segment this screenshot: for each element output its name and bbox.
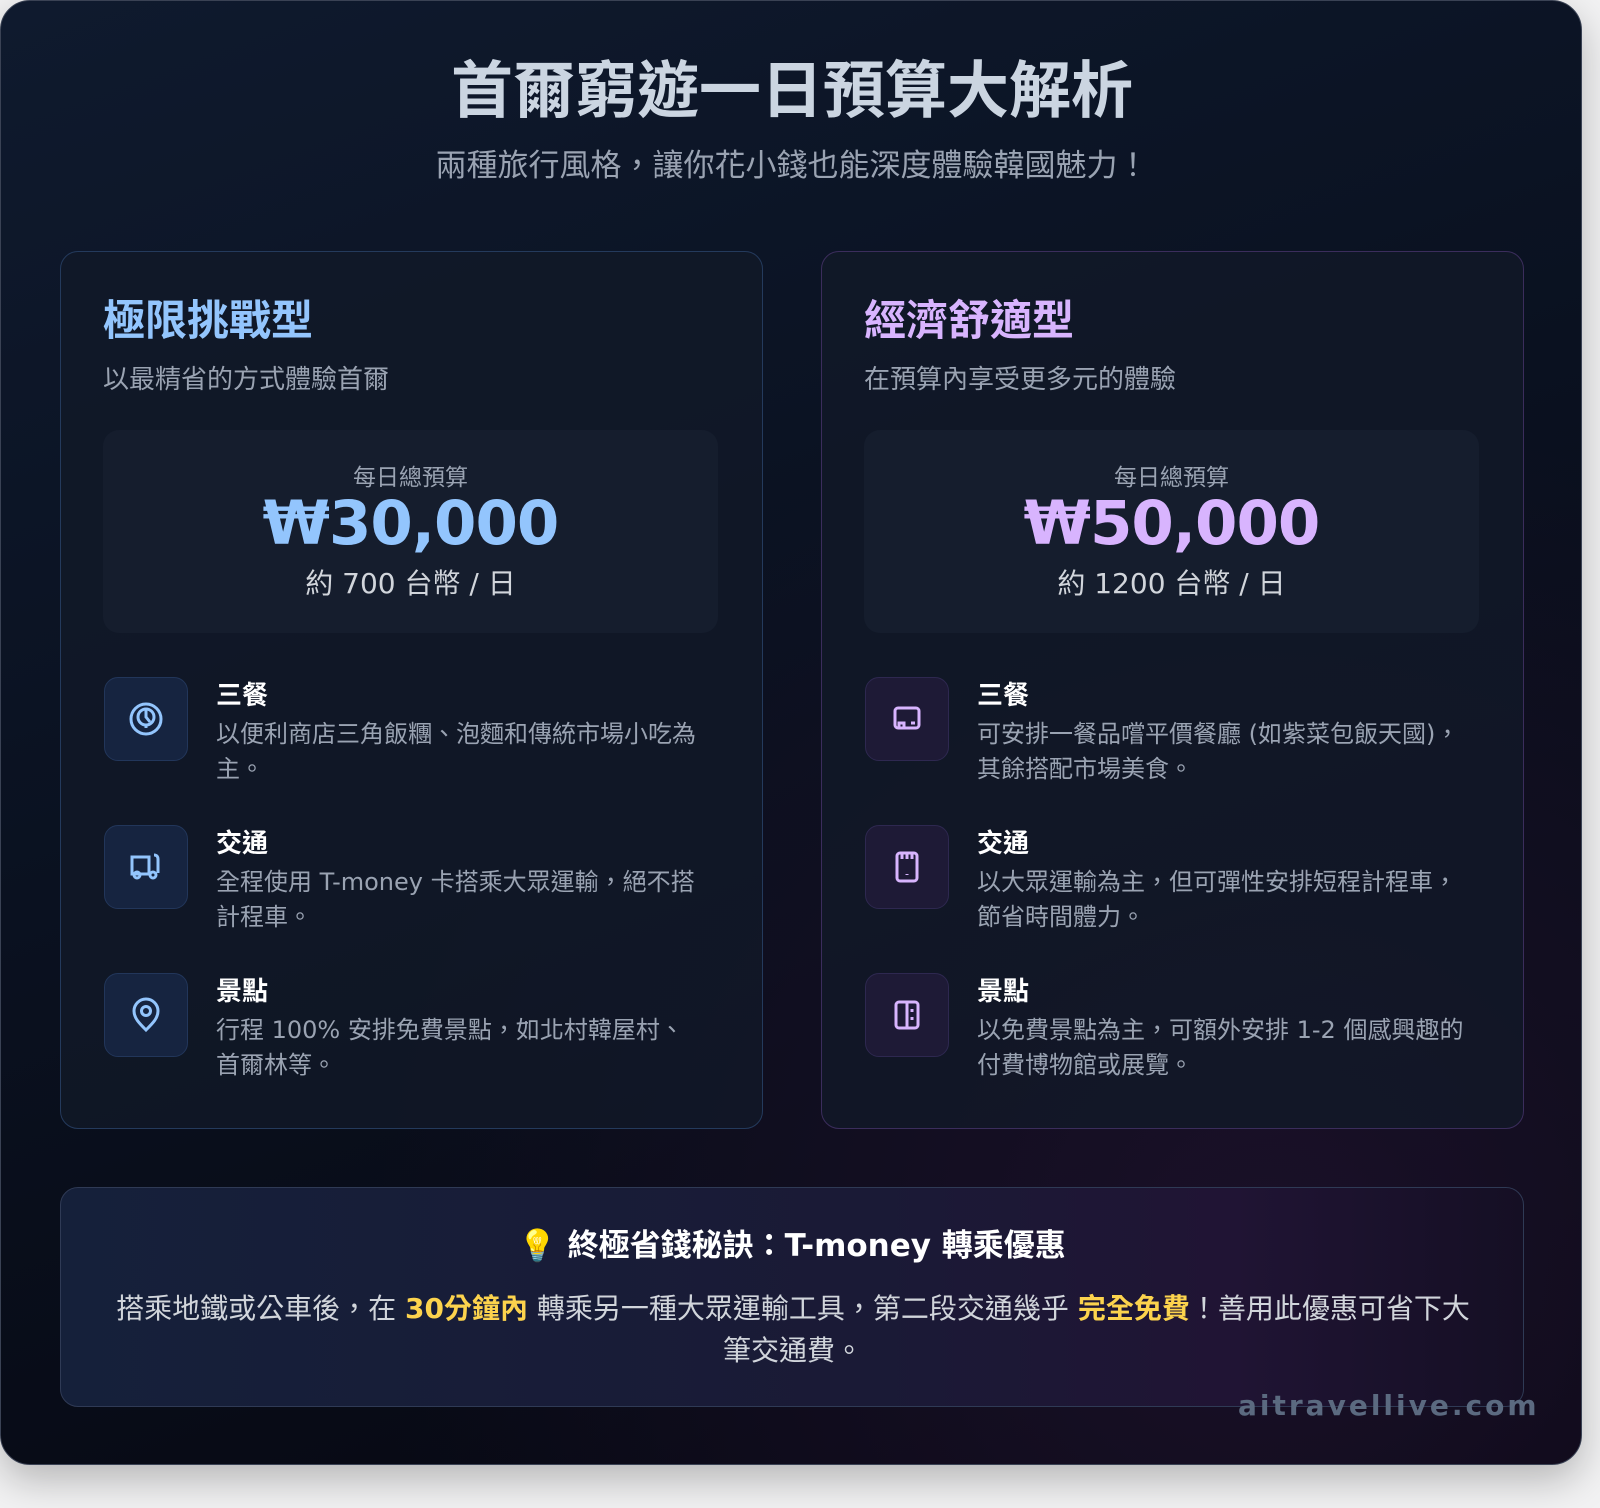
budget box: ₩30,000 [263, 488, 558, 559]
item: sights: 景點 [977, 977, 1029, 1007]
item: meals: 以便利商店三角飯糰、泡麵和傳統市場小吃為主。 [216, 720, 696, 783]
callout text [116, 1292, 1470, 1367]
budget box: 每日總預算 [353, 465, 468, 491]
callout: T-money tip [60, 1187, 1524, 1407]
item: sights: 以免費景點為主，可額外安排 1-2 個感興趣的付費博物館或展覽。 [977, 1016, 1463, 1079]
item: meals: 可安排一餐品嚐平價餐廳 (如紫菜包飯天國)，其餘搭配市場美食。 [977, 720, 1459, 783]
item: sights: 景點 [216, 977, 268, 1007]
panel subtitle: 以最精省的方式體驗首爾 [103, 365, 389, 395]
title: 首爾窮遊一日預算大解析 [451, 40, 1133, 130]
budget box: 約 700 台幣 / 日 [305, 567, 516, 600]
item: sights: 行程 100% 安排免費景點，如北村韓屋村、首爾林等。 [216, 1016, 684, 1079]
budget box: 每日總預算 [1114, 465, 1229, 491]
panel: extreme challenge [60, 251, 763, 1129]
callout text: 筆交通費。 [723, 1334, 863, 1367]
callout text: 搭乘地鐵或公車後，在 30分鐘內 轉乘另一種大眾運輸工具，第二段交通幾乎 完全免費！善用此優惠可省下大 [116, 1292, 1470, 1325]
panel: economy comfort [821, 251, 1524, 1129]
budget box: 約 1200 台幣 / 日 [1057, 567, 1286, 600]
item: sights [865, 973, 1463, 1079]
item: transport: 交通 [216, 829, 268, 859]
subtitle: 兩種旅行風格，讓你花小錢也能深度體驗韓國魅力！ [436, 148, 1148, 184]
callout title: 💡 終極省錢秘訣：T-money 轉乘優惠 [518, 1228, 1066, 1264]
item: meals: 三餐 [977, 681, 1029, 711]
item: transport [104, 825, 695, 931]
item: meals [865, 677, 1459, 783]
item: transport: 全程使用 T-money 卡搭乘大眾運輸，絕不搭計程車。 [216, 868, 695, 931]
icon: phone/taxi [865, 825, 949, 909]
panel heading: 極限挑戰型 [103, 296, 313, 345]
icon: meal clock [104, 677, 188, 761]
panel subtitle: 在預算內享受更多元的體驗 [864, 365, 1176, 395]
panel heading: 經濟舒適型 [864, 296, 1074, 345]
icon: bus [104, 825, 188, 909]
budget box [103, 430, 718, 633]
item: transport [865, 825, 1457, 931]
budget box [864, 430, 1479, 633]
item: meals: 三餐 [216, 681, 268, 711]
item: transport: 以大眾運輸為主，但可彈性安排短程計程車，節省時間體力。 [977, 868, 1457, 931]
icon: restaurant [865, 677, 949, 761]
icon: location pin [104, 973, 188, 1057]
watermark: aitravellive.com [1238, 1389, 1540, 1422]
item: sights [104, 973, 684, 1079]
icon: ticket [865, 973, 949, 1057]
budget box: ₩50,000 [1024, 488, 1319, 559]
item: transport: 交通 [977, 829, 1029, 859]
item: meals [104, 677, 696, 783]
